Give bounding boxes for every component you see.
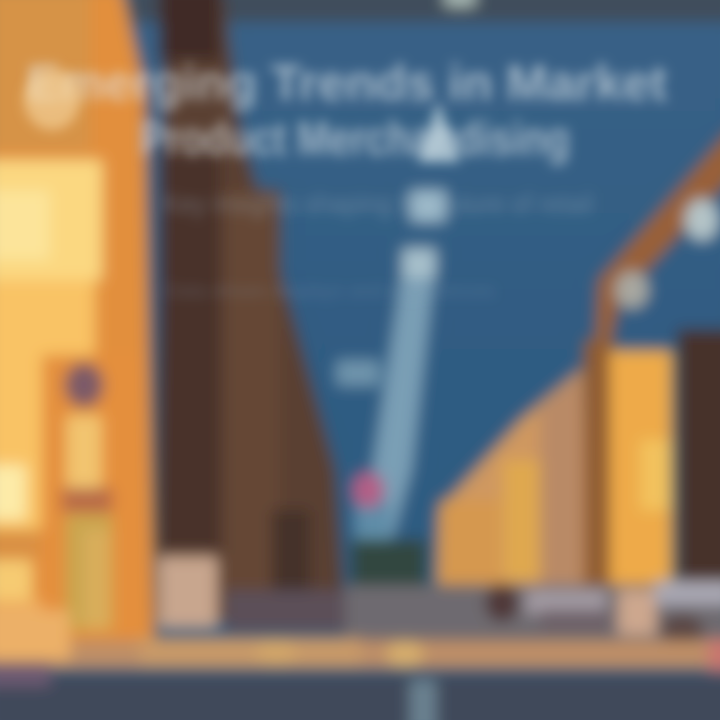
pink marker: [352, 472, 384, 508]
body text: Data driven displays and experiences: [165, 281, 495, 301]
street objects: [345, 580, 720, 646]
road: [0, 640, 720, 720]
subtitle: Key insights shaping the future of retail: [163, 188, 593, 219]
triangle logo: [418, 100, 460, 162]
building: right low facade: [436, 365, 600, 590]
building: central brown tower: [155, 0, 350, 632]
sidewalk band: [0, 610, 720, 668]
light tower and beam: [336, 190, 446, 550]
crane arm right: [595, 125, 720, 345]
title: Emerging Trends in Market: [27, 55, 667, 111]
left doorway with figure: [62, 363, 112, 630]
pale box at tower foot: [158, 556, 218, 628]
building: left orange facade: [0, 0, 155, 660]
dark base under tower: [352, 540, 426, 590]
top dark strip: [130, 0, 720, 22]
title warm glow: [24, 70, 80, 130]
title: Product Merchandising: [140, 113, 570, 166]
title: [27, 55, 667, 166]
building: right lit tower: [584, 330, 720, 590]
